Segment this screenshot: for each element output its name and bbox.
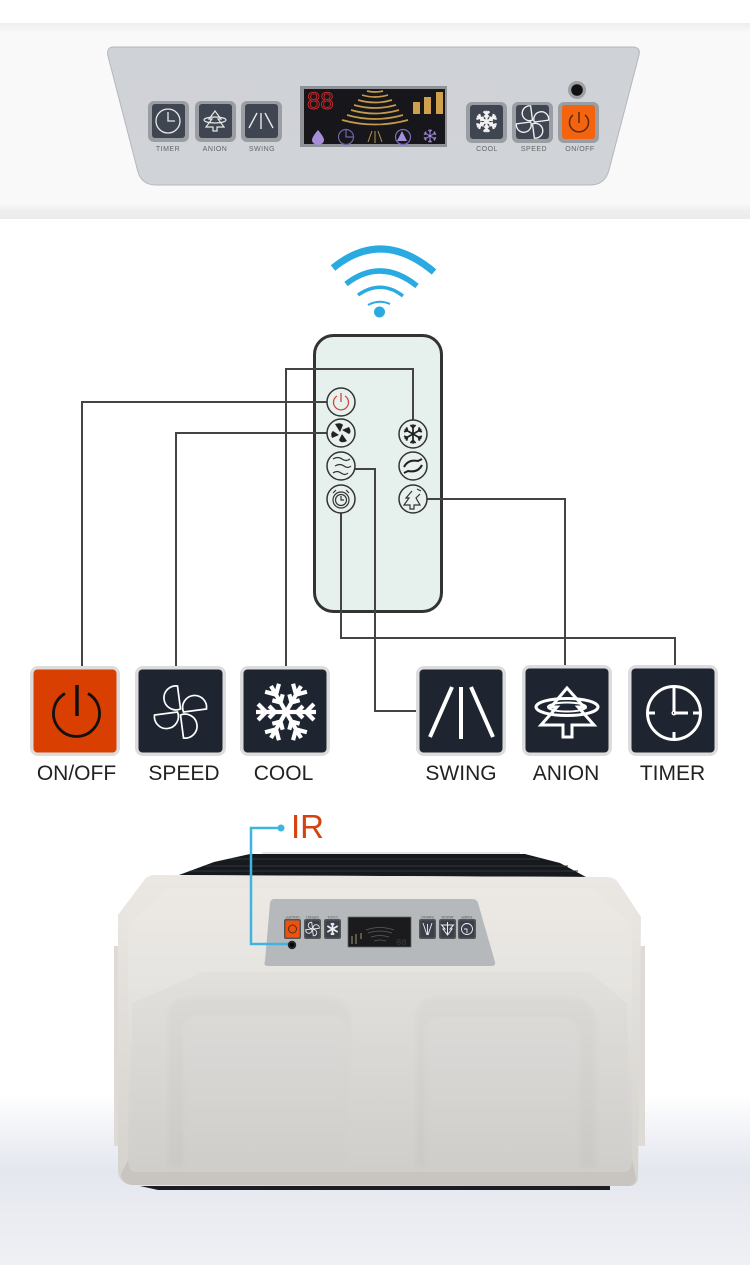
unit outer shell — [118, 875, 641, 1186]
remote wave button — [327, 452, 355, 480]
on/off mini button — [284, 915, 301, 939]
level bars — [413, 92, 443, 114]
speed mini button — [304, 915, 321, 939]
swing button — [241, 101, 282, 153]
remote control — [82, 336, 675, 711]
status icons — [312, 129, 436, 145]
remote anion button — [399, 485, 427, 513]
on/off mini button: ON/OFF — [285, 915, 300, 919]
airflow arcs — [342, 91, 408, 124]
anion button: ANION — [203, 146, 227, 153]
label: speed: SPEED — [148, 762, 220, 785]
button: cool — [240, 666, 330, 756]
remote snow button — [399, 420, 427, 448]
connector lines — [82, 369, 675, 711]
unit control panel — [264, 899, 495, 966]
button: swing — [416, 666, 506, 756]
cool button — [466, 102, 507, 153]
label: IR: IR — [291, 808, 324, 845]
remote clock button — [327, 485, 355, 513]
remote power button — [327, 388, 355, 416]
button: timer — [628, 665, 718, 756]
photo band — [0, 23, 750, 219]
rear black grille — [179, 853, 586, 877]
IR sensor — [568, 81, 586, 99]
bottom lip — [121, 1160, 636, 1186]
button: anion — [522, 665, 612, 756]
side rails — [114, 946, 645, 1146]
button: on/off — [30, 666, 120, 756]
base shadow — [140, 1186, 610, 1190]
mini display — [348, 917, 411, 948]
swing button: SWING — [249, 146, 275, 153]
IR sensor hole — [288, 941, 296, 949]
floor shading — [0, 1095, 750, 1265]
timer mini button: TIMER — [461, 915, 473, 919]
anion mini button — [439, 915, 456, 939]
label: on/off: ON/OFF — [37, 762, 116, 785]
LCD display — [300, 86, 447, 147]
swing mini button — [419, 915, 436, 939]
speed button: SPEED — [521, 146, 547, 153]
speed mini button: SPEED — [306, 915, 319, 919]
timer button: TIMER — [156, 146, 180, 153]
mini display: 88 — [396, 938, 407, 948]
timer button — [148, 101, 189, 153]
IR callout line — [251, 828, 290, 944]
cool button: COOL — [476, 146, 498, 153]
anion button — [195, 101, 236, 153]
remote swap button — [399, 452, 427, 480]
label: anion: ANION — [533, 762, 599, 785]
panel: unit control panel photo — [0, 23, 750, 219]
icon: wireless signal — [333, 249, 434, 318]
control panel plate — [108, 47, 639, 185]
button: speed — [135, 666, 226, 756]
label: cool: COOL — [254, 762, 313, 785]
swing mini button: SWING — [421, 915, 434, 919]
inner front face — [128, 888, 632, 1172]
IR callout dot — [278, 824, 284, 832]
remote body — [314, 336, 442, 612]
label: timer: TIMER — [640, 762, 705, 785]
cool mini button — [324, 915, 341, 939]
on/off button: ON/OFF — [565, 146, 595, 153]
speed button — [512, 102, 553, 153]
label: swing: SWING — [425, 762, 497, 785]
timer mini button — [458, 915, 476, 939]
product: front of unit — [114, 853, 645, 1190]
cool mini button: COOL — [327, 915, 338, 919]
anion mini button: ANION — [441, 915, 454, 919]
embossed recesses — [168, 998, 596, 1168]
lower facet — [130, 972, 630, 1172]
remote fan button — [327, 419, 355, 447]
on/off button — [558, 102, 599, 153]
red digits: 88 — [307, 88, 334, 115]
